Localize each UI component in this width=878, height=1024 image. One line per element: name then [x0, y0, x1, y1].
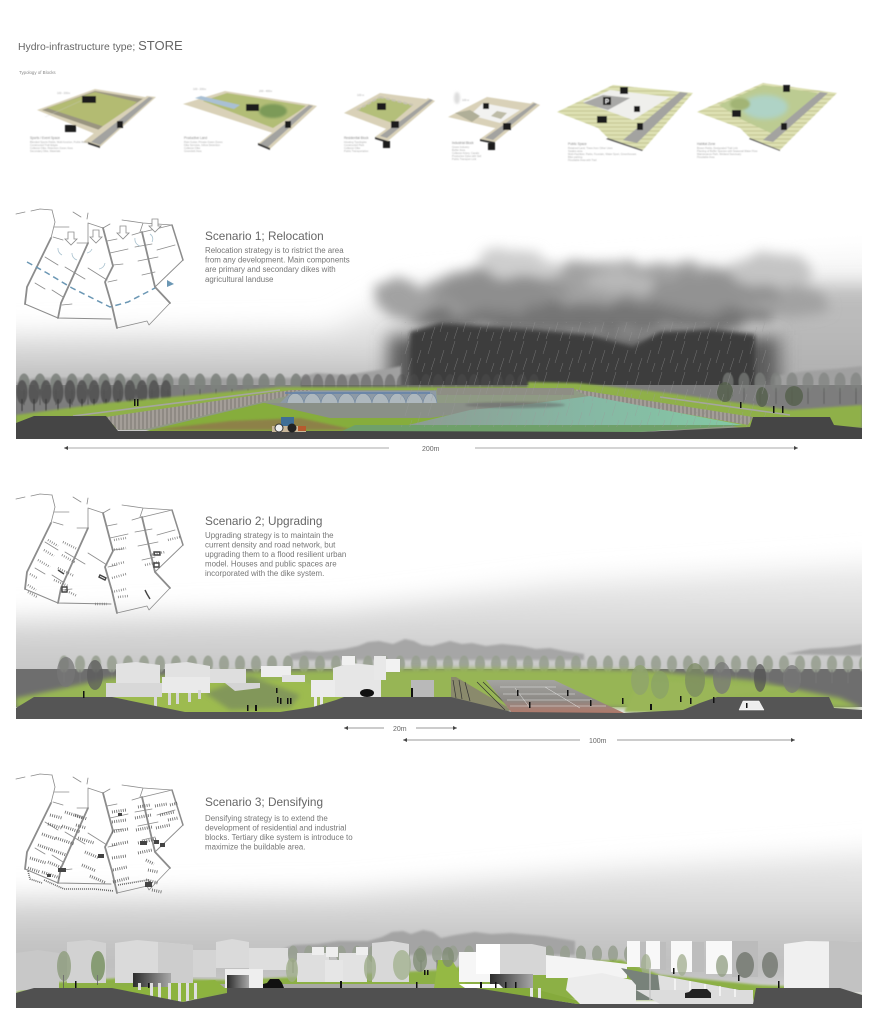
dimension: 200m: 200m — [422, 446, 440, 453]
terrace steps — [451, 677, 512, 712]
map: scenario 3 densifying — [16, 774, 183, 893]
text: scenario 2 description: upgrading them to a flood resilient urban — [205, 550, 346, 559]
block: productive land: Rain Gutter, Private Green Zones — [184, 140, 223, 144]
back land — [16, 669, 862, 707]
dense housing marks — [28, 803, 178, 892]
housing marks — [28, 537, 180, 604]
people — [83, 688, 748, 711]
tree row — [58, 655, 862, 673]
foreground trees — [57, 657, 801, 699]
foreground trees right — [717, 382, 803, 407]
block: industrial block: Industrial Block — [452, 141, 474, 145]
car — [360, 689, 374, 697]
basin — [118, 390, 750, 430]
back land — [16, 385, 862, 428]
block: residential block: Constructed Park — [344, 143, 365, 147]
agricultural field — [146, 403, 449, 431]
typology heading: Typology of Blocks — [19, 70, 56, 75]
ground section — [16, 416, 862, 439]
block: sports and event space: Sports / Event Space — [30, 136, 60, 140]
grass — [16, 960, 862, 1000]
left retaining wall — [106, 390, 313, 430]
foreground trees — [57, 947, 799, 988]
block: sports and event space: Constructed Trail Edges — [30, 143, 58, 147]
block: residential block: Public Transportation — [344, 149, 369, 153]
map: scenario 1 relocation — [16, 209, 183, 328]
mountains — [290, 639, 862, 660]
dimension: 20m — [344, 726, 457, 733]
right side haze — [770, 276, 862, 374]
rain curtain — [407, 320, 758, 385]
tree rows — [16, 372, 862, 411]
greenhouses — [280, 391, 437, 403]
sky — [0, 848, 878, 995]
block: residential block — [344, 93, 435, 153]
car right — [685, 989, 711, 998]
dimension: 20m: 20m — [393, 726, 407, 733]
block: habitat zone: Floodable Area — [697, 155, 715, 159]
grass banks — [16, 382, 862, 428]
block: public space: Bike parking — [568, 155, 583, 159]
block: public space: Swales area — [568, 149, 583, 153]
title: Hydro-infrastructure type; STORE — [18, 38, 183, 53]
back tree row — [285, 945, 630, 973]
mountains — [280, 930, 575, 955]
right retaining wall — [573, 389, 753, 425]
block: public space: Public Space — [568, 142, 587, 146]
text: scenario 2 description: Upgrading strategy is to maintain the — [205, 531, 334, 540]
block: public space: Retained Land, Trees from Other Uses — [568, 146, 613, 150]
block: sports and event space: Collector Dike, Retention Green Area — [30, 146, 73, 150]
heading: scenario 2: Scenario 2; Upgrading — [205, 514, 322, 528]
block: industrial block: Productive Dyke with Soil — [452, 154, 482, 158]
storm cloud — [375, 252, 825, 338]
road strip — [196, 984, 440, 988]
block: sports and event space — [30, 89, 156, 153]
buildings centre right — [459, 944, 636, 1004]
block: habitat zone — [697, 83, 837, 159]
ground section — [16, 988, 862, 1008]
mountains — [16, 366, 862, 386]
block: residential block: Collector Dike — [344, 146, 361, 150]
text: scenario 3 description: blocks. Tertiary dike system is introduce to — [205, 833, 353, 842]
car left — [263, 979, 284, 988]
grass field — [16, 668, 862, 714]
block: sports and event space: 100 - 200m — [57, 91, 70, 95]
stilts — [138, 983, 197, 1003]
block: industrial block: Green Industry — [452, 145, 470, 149]
housing row right — [627, 941, 758, 977]
text: scenario 3 description: development of residential and industrial — [205, 824, 346, 832]
rain — [400, 322, 770, 427]
block: industrial block: 100 m — [462, 98, 469, 102]
heading: scenario 1: Scenario 1; Relocation — [205, 229, 324, 243]
dimension: 200m — [64, 446, 798, 453]
block: productive land: Collector Dike — [184, 146, 201, 150]
back wall — [437, 388, 574, 395]
panel: scenario 3 section drawing — [0, 848, 878, 1008]
rain curtain haze — [388, 335, 780, 395]
block: industrial block: Collector Artery, Canals — [452, 151, 480, 155]
pavilion — [739, 701, 764, 710]
white buildings left — [106, 662, 305, 707]
block: productive land: Dike Services, Inflow Detention — [184, 143, 220, 147]
block: public space: Floodable Area with Trail — [568, 158, 597, 162]
heading: scenario 3: Scenario 3; Densifying — [205, 795, 323, 809]
block: productive land: 100 - 200m — [193, 87, 206, 91]
block: residential block: Residential Block — [344, 136, 369, 140]
buildings centre — [297, 941, 409, 982]
paths — [73, 390, 790, 416]
block: residential block: Housing Typologies — [344, 140, 367, 144]
dimension: 100m — [403, 738, 795, 745]
block: habitat zone: Maintenance Path, Wetland Sanctuary — [697, 152, 742, 156]
panel: typology of blocks — [30, 83, 837, 162]
sports court — [486, 680, 624, 713]
people — [134, 399, 784, 413]
panel: scenario 1 section drawing — [0, 250, 878, 440]
text: scenario 1 description: Relocation strategy is to ristrict the area — [205, 246, 344, 255]
building openings — [133, 973, 249, 988]
buildings left — [16, 939, 288, 990]
block: habitat zone: Habitat Zone — [697, 142, 715, 146]
text: scenario 1 description: agricultural landuse — [205, 275, 274, 284]
flood arrows — [65, 219, 161, 245]
people — [75, 968, 780, 988]
block: habitat zone: Planting of Buffer Species with Seasonal Water Flow — [697, 149, 758, 153]
block: habitat zone: Brown Fields, Designated Trail Link — [697, 146, 738, 150]
block: productive land: Greenbelt Area — [184, 149, 202, 153]
blue water flow line — [27, 262, 174, 307]
tractor — [272, 417, 306, 432]
block: public space: Multi-Facilities: Parks, Fountain, Water Sport, Greenhouses — [568, 152, 637, 156]
ground section — [16, 697, 862, 719]
text: scenario 1 description: are primary and secondary dikes with — [205, 265, 336, 274]
text: scenario 3 description: Densifying strategy is to extend the — [205, 814, 328, 823]
block: productive land: Productive Land — [184, 136, 207, 140]
sky — [0, 560, 878, 710]
block: industrial block: Buffer Area — [452, 148, 465, 152]
block: public space: P — [605, 100, 609, 106]
retention water — [400, 396, 743, 427]
block: sports and event space: Secondary Dike, Materials — [30, 149, 61, 153]
block: public space — [557, 85, 693, 162]
block: productive land: 200 - 400m — [259, 89, 272, 93]
white buildings centre — [311, 656, 434, 707]
swirl marks — [58, 234, 153, 269]
dimension: 100m: 100m — [589, 738, 607, 745]
text: scenario 2 description: current density and road network, but — [205, 540, 336, 550]
block: industrial block: Public Transport Link — [452, 157, 477, 161]
block: residential block: 100 m — [357, 93, 364, 97]
text: scenario 1 description: from any development. Main components — [205, 256, 350, 264]
map: scenario 2 upgrading — [16, 494, 183, 613]
panel: scenario 2 section drawing — [0, 560, 878, 719]
block: productive land — [183, 87, 317, 153]
block: industrial block — [448, 92, 540, 161]
green avenue — [434, 960, 468, 988]
block: sports and event space: Blended Sports Fields, Multi-function, Public Buffer — [30, 140, 88, 144]
text: scenario 2 description: incorporated with the dike system. — [205, 569, 324, 578]
building far right — [784, 941, 862, 990]
sky — [16, 264, 862, 432]
underground parking — [621, 968, 753, 1004]
text: scenario 2 description: model. Houses and public spaces are — [205, 560, 337, 568]
text: scenario 3 description: maximize the buildable area. — [205, 842, 305, 852]
